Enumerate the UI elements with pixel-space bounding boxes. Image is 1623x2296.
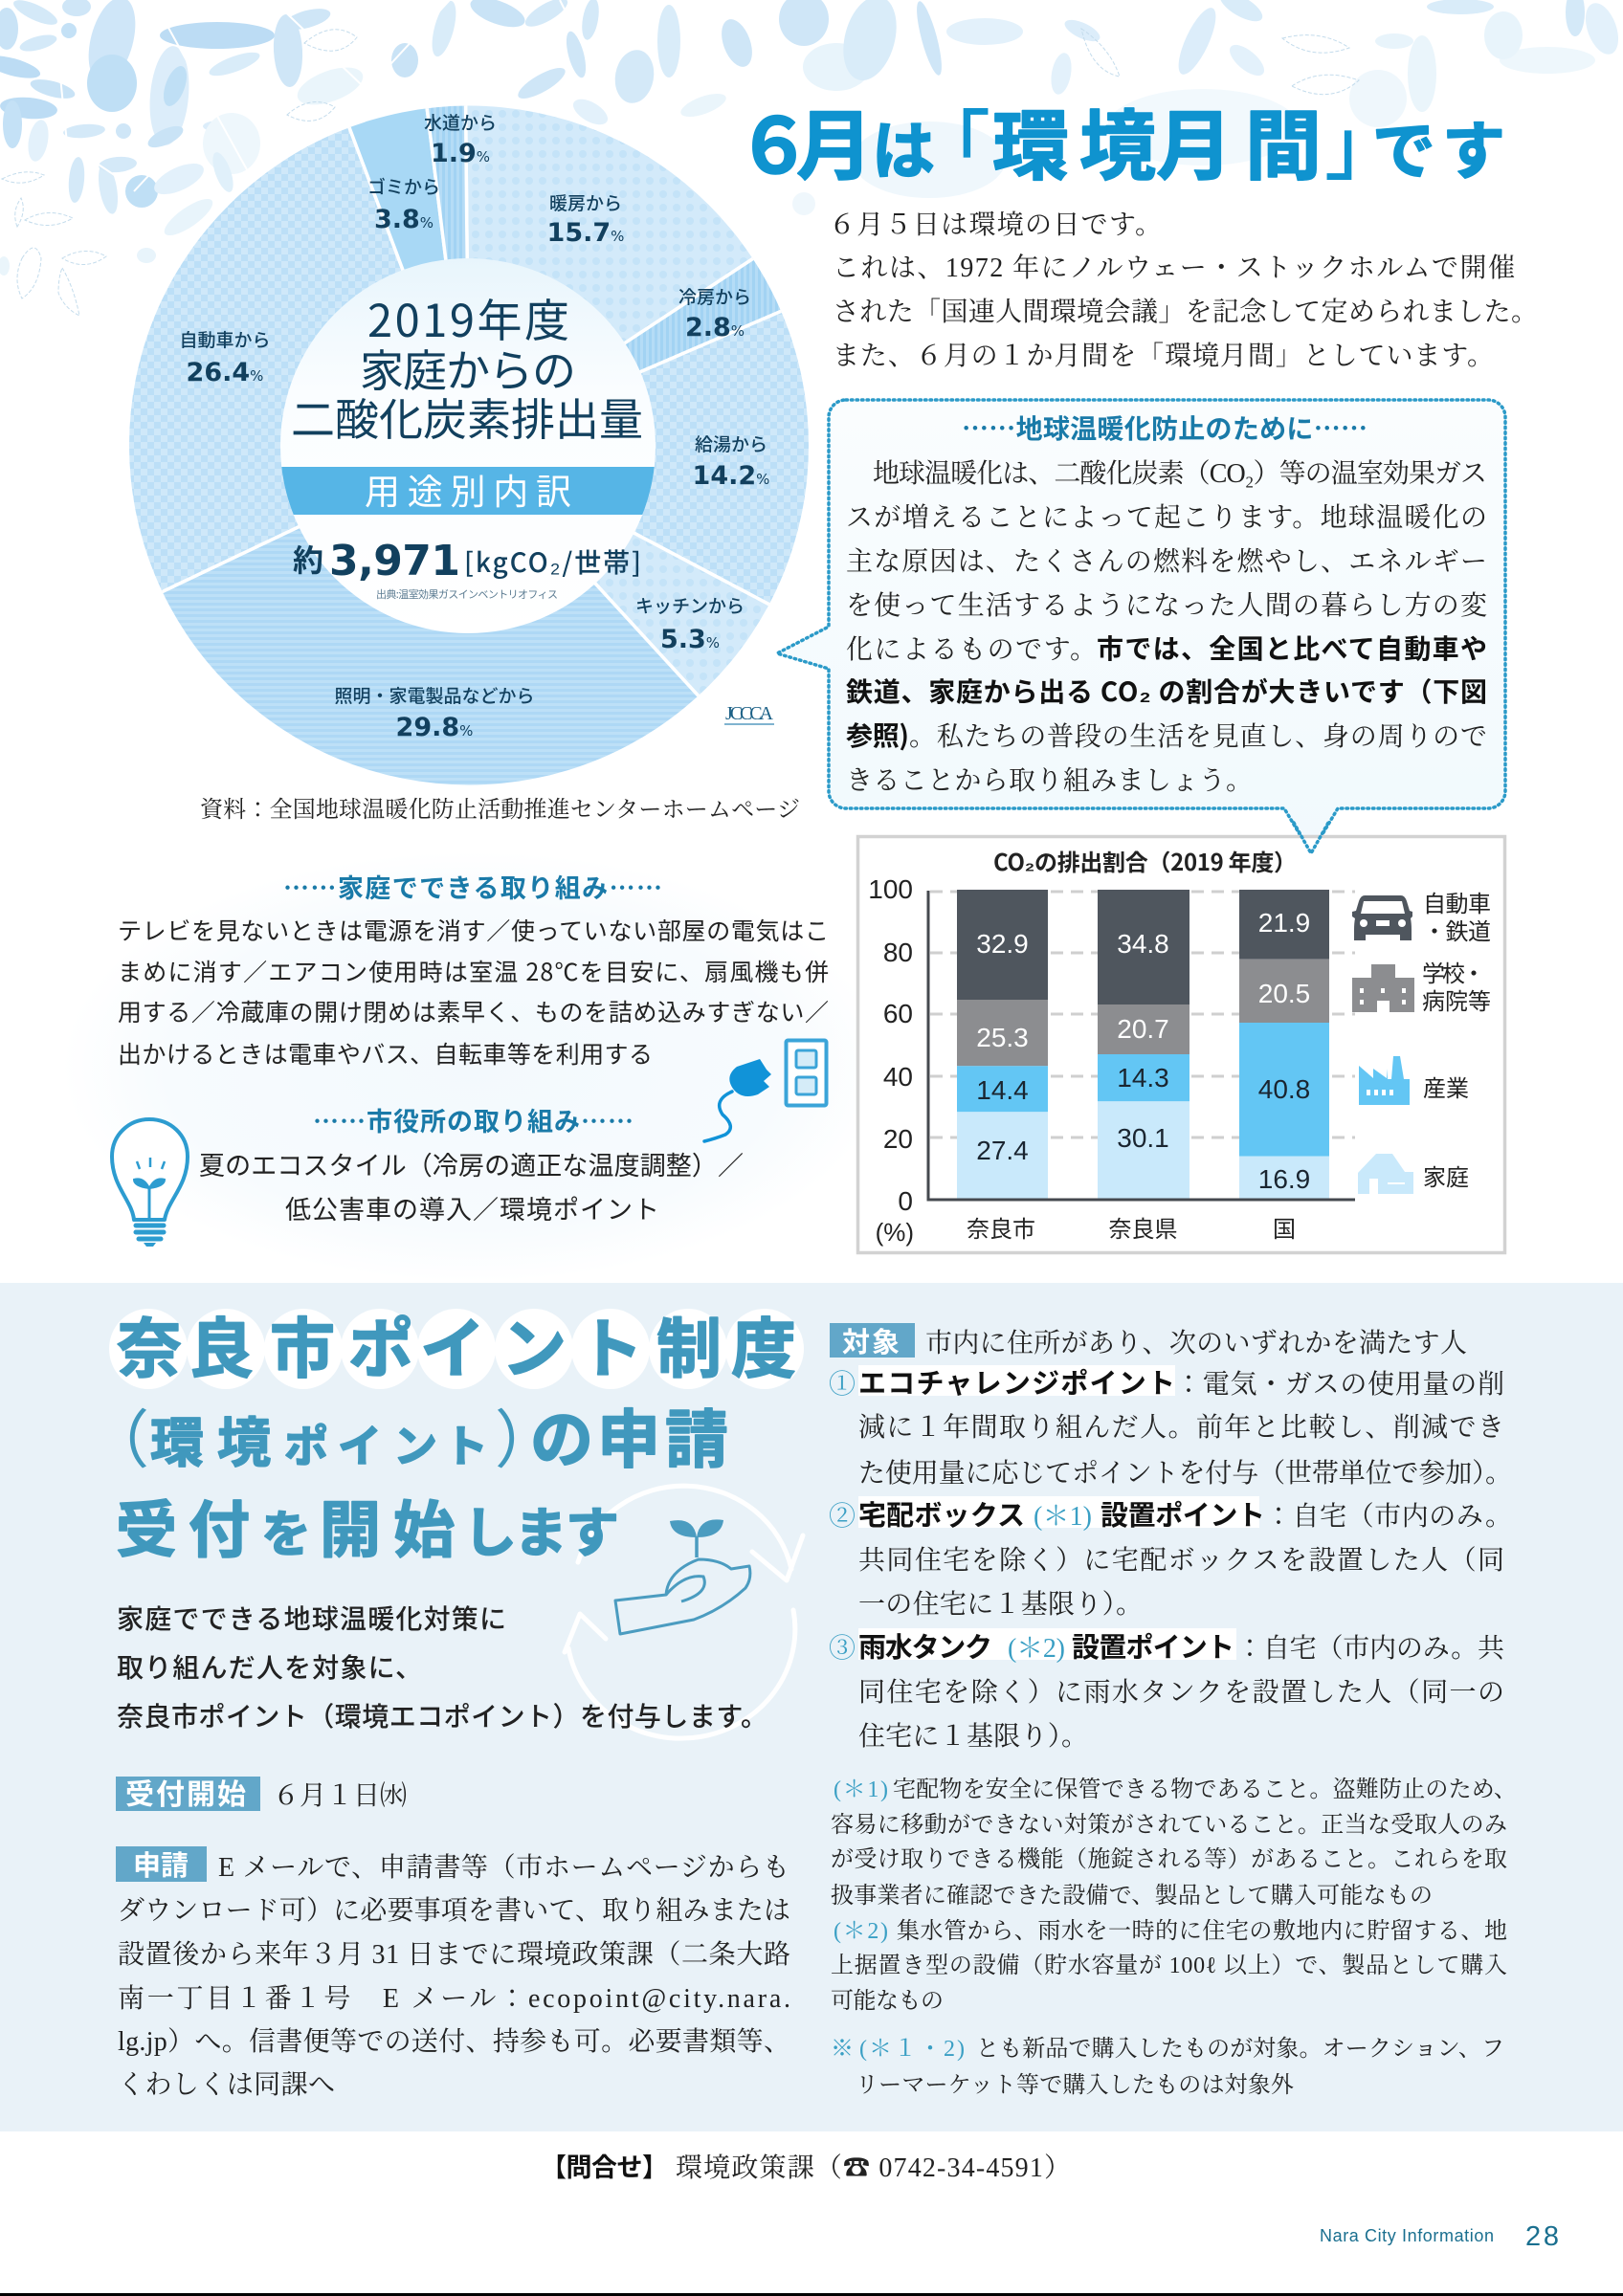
center heading: 2019年度	[367, 284, 569, 350]
footnotes: (＊2)	[834, 1919, 888, 1944]
heading: point program: 開始	[320, 1482, 455, 1570]
heading: point program: （	[86, 1389, 149, 1481]
callout body: 地球温暖化は、二酸化炭素（CO₂）等の温室効果ガス	[873, 458, 1487, 489]
slice labels: 5.3%	[660, 625, 720, 654]
application details: 南一丁目１番１号 E メール：ecopoint@city.nara.	[118, 1983, 790, 2014]
source caption: 資料：全国地球温暖化防止活動推進センターホームページ	[200, 797, 800, 823]
city hall text: 低公害車の導入／環境ポイント	[285, 1189, 659, 1226]
donut slices	[129, 105, 809, 784]
legend: schools and hospitals: 病院等	[1422, 982, 1491, 1016]
eligibility item 3: 設置ポイント	[1072, 1625, 1234, 1666]
x axis labels: 奈良市	[967, 1210, 1035, 1244]
main title: です	[1372, 100, 1505, 192]
intro text: また、６月の１か月間を「環境月間」としています。	[833, 341, 1494, 371]
reception start: ６月１日㈬	[273, 1780, 407, 1811]
main title: ６月	[736, 85, 873, 196]
bar: Nara City: 27.4	[976, 1136, 1029, 1165]
household text: テレビを見ないときは電源を消す／使っていない部屋の電気はこ	[118, 913, 829, 947]
city hall text: 夏のエコスタイル（冷房の適正な温度調整）／	[199, 1145, 744, 1182]
application details: 申請	[133, 1843, 189, 1884]
footnotes: が受け取りできる機能（施錠される等）があること。これらを取	[831, 1846, 1507, 1872]
eligibility item 3: 雨水タンク	[858, 1625, 992, 1666]
icon: plug and outlet	[704, 1041, 827, 1141]
application details: E メールで、申請書等（市ホームページからも	[218, 1852, 789, 1883]
eligibility item 1: ①	[829, 1369, 856, 1400]
heading: point program: を	[261, 1494, 311, 1566]
callout bubble	[777, 400, 1505, 853]
footnotes: 上据置き型の設備（貯水容量が 100ℓ 以上）で、製品として購入	[831, 1953, 1507, 1978]
bar: Japan: 40.8	[1258, 1074, 1310, 1104]
eligibility item 3: (＊2)	[1008, 1634, 1065, 1664]
callout body: 市では、全国と比べて自動車や	[1097, 629, 1487, 667]
slice labels: 29.8%	[396, 713, 473, 742]
eligibility item 1: エコチャレンジポイント	[858, 1361, 1175, 1402]
lead text: 奈良市ポイント（環境エコポイント）を付与します。	[117, 1696, 767, 1734]
slice labels: 冷房から	[678, 283, 751, 309]
intro text: ６月５日は環境の日です。	[829, 210, 1162, 240]
footnotes: 扱事業者に確認できた設備で、製品として購入可能なもの	[831, 1883, 1433, 1909]
center band	[273, 467, 665, 515]
panel: what households and city can do	[62, 851, 885, 1282]
callout tip over chart	[1294, 823, 1328, 853]
main title: 「	[914, 85, 990, 196]
heading: point program: の申請	[530, 1389, 728, 1481]
footnotes: (＊1)	[834, 1777, 888, 1802]
callout heading: ……地球温暖化防止のために……	[962, 408, 1367, 447]
eligibility item 2: 共同住宅を除く）に宅配ボックスを設置した人（同	[858, 1545, 1504, 1576]
y axis labels: 40	[883, 1062, 913, 1092]
lead text	[117, 1599, 767, 1734]
footnotes: リーマーケット等で購入したものは対象外	[856, 2072, 1294, 2098]
bar: Nara City: 32.9	[976, 929, 1029, 959]
legend: schools and hospitals	[1352, 955, 1491, 1016]
legend: car and railway: 自動車	[1423, 885, 1491, 918]
bar: Japan: 20.5	[1258, 979, 1310, 1008]
application details: くわしくは同課へ	[118, 2070, 335, 2100]
callout body: 。私たちの普段の生活を見直し、身の周りので	[909, 721, 1487, 752]
eligibility item 3: 住宅に１基限り）。	[858, 1721, 1088, 1752]
eligibility item 2: 宅配ボックス	[858, 1493, 1025, 1534]
reception start: 受付開始	[125, 1771, 246, 1813]
chart frame	[857, 836, 1504, 1253]
panel: CO2 share bar chart	[857, 823, 1504, 1253]
slice labels: 水道から	[424, 109, 497, 135]
footnotes: 宅配物を安全に保管できる物であること。盗難防止のため、	[893, 1777, 1517, 1802]
eligibility	[830, 1320, 1467, 1360]
callout body: きることから取り組みましょう。	[846, 765, 1253, 796]
source small print: 出典:温室効果ガスインベントリオフィス	[376, 586, 558, 602]
footnotes: とも新品で購入したものが対象。オークション、フ	[976, 2036, 1504, 2062]
callout body: 鉄道、家庭から出る CO₂ の割合が大きいです（下図	[846, 672, 1487, 710]
icon: hand holding sprout with recycling arrows	[565, 1486, 803, 1738]
eligibility item 1: ：電気・ガスの使用量の削	[1175, 1369, 1504, 1400]
icon: light bulb with sprout	[112, 1119, 188, 1247]
footnotes: 可能なもの	[831, 1988, 944, 2014]
application details: ダウンロード可）に必要事項を書いて、取り組みまたは	[118, 1895, 790, 1926]
contact line: 【問合せ】	[541, 2147, 668, 2184]
eligibility item 3	[829, 1625, 1504, 1752]
chart title: CO₂の排出割合（2019 年度）	[993, 844, 1297, 877]
footnotes: (＊１・2)	[859, 2037, 965, 2062]
bar: Nara Prefecture: 14.3	[1117, 1063, 1169, 1093]
eligibility item 1: た使用量に応じてポイントを付与（世帯単位で参加）。	[858, 1458, 1512, 1489]
footer: publication name and page number: Nara City Information	[1320, 2226, 1494, 2245]
intro text: された「国連人間環境会議」を記念して定められました。	[833, 297, 1538, 327]
bar: Nara Prefecture: 34.8	[1117, 929, 1169, 959]
main title: 」	[1324, 85, 1401, 196]
eligibility item 2: 設置ポイント	[1101, 1493, 1265, 1534]
reception start	[116, 1771, 407, 1813]
background: watercolor leaves	[0, 0, 1623, 316]
logo JCCCA: JCCCA	[725, 703, 774, 724]
main title: は	[872, 100, 935, 192]
intro text: これは、1972 年にノルウェー・ストックホルムで開催	[833, 253, 1515, 283]
eligibility item 3: ：自宅（市内のみ。共	[1236, 1633, 1504, 1664]
donut chart: household CO2 emissions by use	[129, 105, 809, 784]
footnotes: 容易に移動ができない対策がされていること。正当な受取人のみ	[831, 1812, 1507, 1838]
total amount: 約	[293, 537, 323, 581]
y axis labels	[868, 874, 914, 1247]
footer: publication name and page number	[1320, 2221, 1559, 2252]
eligibility item 2: ：自宅（市内のみ。	[1265, 1501, 1512, 1532]
slice labels: キッチンから	[635, 592, 745, 618]
legend: household	[1358, 1154, 1469, 1194]
callout body	[846, 458, 1487, 796]
x axis labels	[967, 1210, 1296, 1244]
footnotes: 集水管から、雨水を一時的に住宅の敷地内に貯留する、地	[897, 1918, 1507, 1944]
slice labels: 15.7%	[547, 218, 624, 248]
heading: point program: 環境	[150, 1401, 271, 1478]
heading: point program: ）	[495, 1389, 558, 1481]
eligibility item 2	[829, 1493, 1512, 1620]
callout body: スが増えることによって起こります。地球温暖化の	[846, 502, 1487, 533]
slice labels: 照明・家電製品などから	[334, 682, 535, 708]
legend: schools and hospitals: 学校・	[1422, 955, 1485, 988]
slice labels: 14.2%	[693, 461, 769, 491]
slice labels: 1.9%	[431, 139, 490, 168]
intro text	[829, 210, 1538, 371]
application details: 設置後から来年３月 31 日までに環境政策課（二条大路	[118, 1939, 790, 1970]
eligibility: 市内に住所があり、次のいずれかを満たす人	[925, 1328, 1467, 1358]
callout: preventing global warming	[777, 400, 1505, 853]
slice labels: 26.4%	[187, 358, 263, 387]
heading: household: ……家庭でできる取り組み……	[283, 868, 662, 905]
application details: lg.jp）へ。信書便等での送付、持参も可。必要書類等、	[118, 2026, 790, 2057]
slice labels: 自動車から	[179, 326, 271, 352]
heading: point program: 受付	[116, 1482, 250, 1570]
legend: industry	[1359, 1056, 1469, 1105]
footer: publication name and page number: 28	[1525, 2221, 1559, 2252]
bar: Nara Prefecture	[1098, 890, 1189, 1199]
legend: car and railway: ・鉄道	[1423, 913, 1491, 946]
heading: point program	[86, 1296, 804, 1570]
eligibility item 3: ③	[829, 1633, 856, 1664]
callout body: を使って生活するようになった人間の暮らし方の変	[846, 590, 1487, 621]
center heading: 二酸化炭素排出量	[291, 386, 643, 449]
slice labels: 給湯から	[695, 430, 767, 456]
callout body: 主な原因は、たくさんの燃料を燃やし、エネルギー	[846, 546, 1487, 577]
bar: Nara Prefecture: 20.7	[1117, 1014, 1169, 1044]
eligibility item 1: 減に１年間取り組んだ人。前年と比較し、削減でき	[858, 1412, 1504, 1443]
household text: まめに消す／エアコン使用時は室温 28℃を目安に、扇風機も併	[118, 954, 829, 988]
gridlines	[930, 892, 1355, 1137]
callout body: 参照)	[846, 716, 909, 754]
heading: point program: ポイント	[284, 1412, 488, 1475]
bar: Japan: 16.9	[1258, 1164, 1310, 1194]
application details	[116, 1843, 790, 2100]
y axis labels: 60	[883, 999, 913, 1028]
callout body: 化によるものです。	[846, 634, 1097, 665]
bar: Nara City	[957, 890, 1048, 1199]
eligibility item 2: ②	[829, 1501, 856, 1532]
x axis labels: 国	[1273, 1210, 1296, 1244]
y axis labels: 0	[898, 1186, 913, 1216]
y axis labels: 100	[868, 874, 913, 904]
eligibility: 対象	[842, 1320, 900, 1360]
donut center	[280, 258, 656, 633]
eligibility item 2: 一の住宅に１基限り）。	[858, 1589, 1143, 1620]
household text	[118, 913, 829, 1071]
slice labels: ゴミから	[367, 173, 440, 199]
heading: point program: 奈良市ポイント制度	[117, 1296, 796, 1391]
slice labels: 2.8%	[685, 313, 745, 342]
slice labels	[179, 109, 769, 742]
center heading	[291, 284, 643, 449]
slice labels: 3.8%	[374, 205, 434, 234]
eligibility item 2: (＊1)	[1034, 1502, 1092, 1532]
y axis labels: 80	[883, 938, 913, 967]
panel: Nara City point program	[0, 1283, 1623, 2131]
heading: city hall: ……市役所の取り組み……	[313, 1101, 634, 1138]
bar: Japan: 21.9	[1258, 908, 1310, 938]
total amount: [kgCO₂/世帯]	[464, 542, 641, 581]
eligibility item 1	[829, 1361, 1512, 1489]
footnotes: ※	[831, 2037, 854, 2062]
contact line	[541, 2147, 1071, 2184]
total amount: 3,971	[329, 537, 460, 585]
household text: 用する／冷蔵庫の開け閉めは素早く、ものを詰め込みすぎない／	[118, 994, 829, 1028]
axes	[928, 891, 1355, 1200]
eligibility item 3: 同住宅を除く）に雨水タンクを設置した人（同一の	[858, 1677, 1504, 1708]
white circles behind title	[109, 1309, 804, 1389]
lead text: 家庭でできる地球温暖化対策に	[117, 1599, 506, 1637]
heading: point program: します	[463, 1490, 619, 1568]
contact line: 環境政策課（☎ 0742-34-4591）	[676, 2152, 1071, 2183]
bar: Nara City: 25.3	[976, 1023, 1029, 1052]
lead text: 取り組んだ人を対象に、	[117, 1647, 422, 1686]
slice labels: 暖房から	[549, 189, 622, 215]
legend: industry: 産業	[1423, 1070, 1469, 1103]
center heading: 家庭からの	[360, 337, 576, 400]
y axis labels: 20	[883, 1124, 913, 1154]
band label: 用途別内訳	[365, 463, 571, 515]
legend: car and railway	[1352, 885, 1491, 946]
bar: Nara Prefecture: 30.1	[1117, 1123, 1169, 1153]
total amount	[293, 537, 641, 585]
y axis labels: (%)	[876, 1218, 914, 1247]
main title: 環境月間	[992, 85, 1322, 196]
x axis labels: 奈良県	[1108, 1210, 1177, 1244]
footnotes	[831, 1777, 1517, 2098]
city hall text	[199, 1145, 744, 1226]
legend: household: 家庭	[1423, 1159, 1469, 1192]
bar: Japan	[1239, 890, 1329, 1199]
household text: 出かけるときは電車やバス、自転車等を利用する	[118, 1036, 653, 1071]
bar: Nara City: 14.4	[976, 1075, 1029, 1105]
